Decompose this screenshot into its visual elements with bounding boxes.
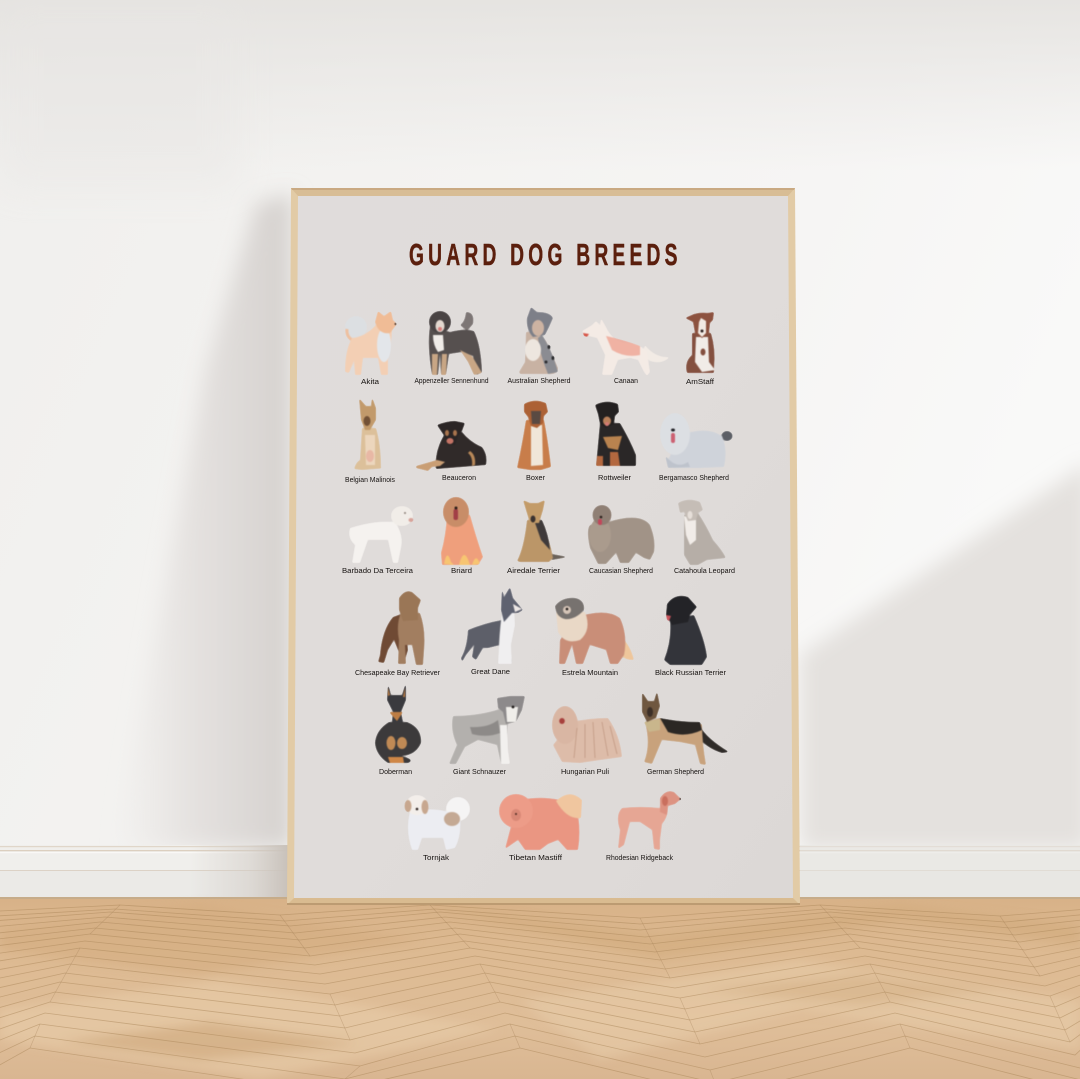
- dog: Catahoula Leopard: [678, 500, 726, 565]
- dog: Appenzeller Sennenhund: [429, 311, 482, 375]
- label: AmStaff: AmStaff: [686, 379, 714, 386]
- dog: Canaan: [582, 318, 670, 376]
- label: Black Russian Terrier: Black Russian Terrier: [655, 670, 727, 677]
- label: Barbado Da Terceira: Barbado Da Terceira: [342, 568, 413, 575]
- dog: Caucasian Shepherd: [588, 505, 654, 564]
- label: Tornjak: Tornjak: [423, 855, 450, 862]
- dog: Tibetan Mastiff: [499, 794, 582, 850]
- dog: Akita: [345, 311, 397, 375]
- label: Beauceron: Beauceron: [442, 475, 476, 482]
- dog: Giant Schnauzer: [449, 696, 525, 764]
- dog: Tornjak: [404, 795, 470, 850]
- poster paper: [294, 196, 793, 898]
- label: Catahoula Leopard: Catahoula Leopard: [674, 568, 735, 575]
- label: German Shepherd: German Shepherd: [647, 769, 704, 776]
- label: Akita: Akita: [361, 379, 379, 386]
- dog: Australian Shepherd: [519, 307, 558, 374]
- label: Appenzeller Sennenhund: Appenzeller Sennenhund: [414, 378, 489, 385]
- dog: AmStaff: [685, 312, 715, 373]
- label: Rhodesian Ridgeback: Rhodesian Ridgeback: [606, 855, 673, 862]
- dog: Boxer: [517, 401, 551, 470]
- label: Belgian Malinois: Belgian Malinois: [345, 477, 395, 484]
- label: Australian Shepherd: Australian Shepherd: [508, 378, 571, 385]
- label: Chesapeake Bay Retriever: Chesapeake Bay Retriever: [355, 670, 441, 677]
- label: Estrela Mountain: Estrela Mountain: [562, 670, 618, 677]
- title: GUARD DOG BREEDS: [409, 239, 677, 272]
- dog: Hungarian Puli: [552, 706, 622, 763]
- dog: German Shepherd: [642, 691, 729, 765]
- dog: Rhodesian Ridgeback: [618, 791, 682, 850]
- label: Bergamasco Shepherd: Bergamasco Shepherd: [659, 475, 729, 482]
- dog: Rottweiler: [595, 402, 636, 466]
- dog: Great Dane: [461, 587, 523, 664]
- label: Great Dane: Great Dane: [471, 669, 510, 676]
- poster frame: [287, 188, 800, 905]
- wall shadow: right diagonal: [800, 462, 1080, 850]
- label: Caucasian Shepherd: Caucasian Shepherd: [589, 568, 653, 575]
- label: Briard: Briard: [451, 568, 472, 575]
- dog: Airedale Terrier: [517, 500, 568, 562]
- dog: Belgian Malinois: [354, 397, 387, 470]
- dog: Bergamasco Shepherd: [660, 413, 732, 468]
- label: Doberman: Doberman: [379, 769, 412, 776]
- dog: Beauceron: [416, 421, 486, 471]
- dog: Chesapeake Bay Retriever: [378, 591, 424, 665]
- dog: Briard: [441, 497, 483, 565]
- dog: Black Russian Terrier: [664, 596, 707, 665]
- label: Rottweiler: Rottweiler: [598, 475, 632, 482]
- floor: herringbone parquet: [0, 899, 1080, 1079]
- label: Airedale Terrier: Airedale Terrier: [507, 568, 561, 575]
- wall shadow: left of poster: [115, 194, 292, 848]
- label: Boxer: Boxer: [526, 475, 546, 482]
- label: Canaan: Canaan: [614, 378, 638, 385]
- dog: Estrela Mountain: [555, 598, 634, 664]
- skirting board: [0, 845, 1080, 899]
- label: Tibetan Mastiff: Tibetan Mastiff: [509, 855, 562, 862]
- dog: Doberman: [375, 682, 421, 763]
- dog: Barbado Da Terceira: [349, 506, 414, 563]
- label: Hungarian Puli: Hungarian Puli: [561, 769, 609, 776]
- label: Giant Schnauzer: Giant Schnauzer: [453, 769, 507, 776]
